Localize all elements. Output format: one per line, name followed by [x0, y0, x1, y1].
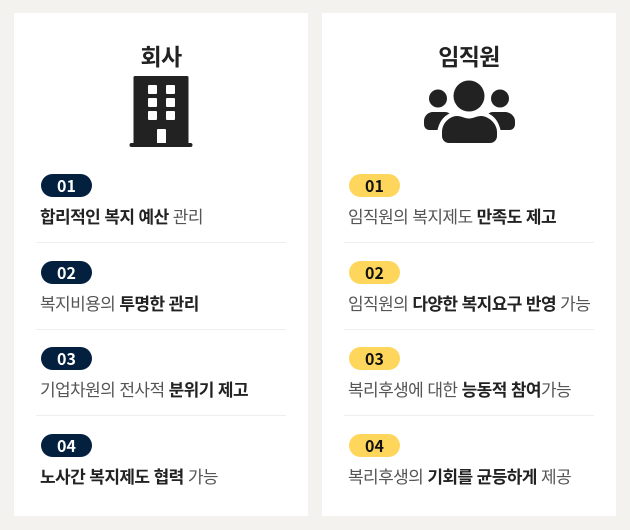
badge 04 — [41, 434, 92, 457]
text 04: 복리후생의 기회를 균등하게 제공 — [348, 463, 571, 488]
badge 04: 04 — [57, 433, 76, 457]
item 04 — [348, 433, 571, 488]
icon: group of people — [424, 80, 515, 143]
panel: employees — [322, 13, 616, 516]
badge 03: 03 — [57, 346, 76, 370]
badge 02 — [349, 261, 400, 284]
text 01: 합리적인 복지 예산 관리 — [40, 203, 203, 228]
text 02: 임직원의 다양한 복지요구 반영 가능 — [348, 290, 590, 315]
item 01 — [348, 173, 556, 228]
heading: company: 회사 — [141, 38, 181, 72]
badge 04 — [349, 434, 400, 457]
badge 02: 02 — [57, 260, 76, 284]
badge 04: 04 — [365, 433, 384, 457]
badge 01: 01 — [57, 173, 76, 197]
item 03 — [40, 346, 248, 401]
text 03: 복리후생에 대한 능동적 참여가능 — [348, 376, 571, 401]
badge 03 — [41, 347, 92, 370]
badge 02 — [41, 261, 92, 284]
item 03 — [348, 346, 571, 401]
item 02 — [348, 260, 590, 315]
item 04 — [40, 433, 218, 488]
heading: employees: 임직원 — [438, 38, 500, 72]
item 02 — [40, 260, 199, 315]
text 03: 기업차원의 전사적 분위기 제고 — [40, 376, 248, 401]
icon: office building — [130, 76, 192, 147]
text 04: 노사간 복지제도 협력 가능 — [40, 463, 218, 488]
item 01 — [40, 173, 203, 228]
badge 03: 03 — [365, 346, 384, 370]
badge 02: 02 — [365, 260, 384, 284]
badge 01: 01 — [365, 173, 384, 197]
badge 01 — [349, 174, 400, 197]
badge 01 — [41, 174, 92, 197]
text 01: 임직원의 복지제도 만족도 제고 — [348, 203, 556, 228]
text 02: 복지비용의 투명한 관리 — [40, 290, 199, 315]
badge 03 — [349, 347, 400, 370]
panel: company — [14, 13, 308, 516]
